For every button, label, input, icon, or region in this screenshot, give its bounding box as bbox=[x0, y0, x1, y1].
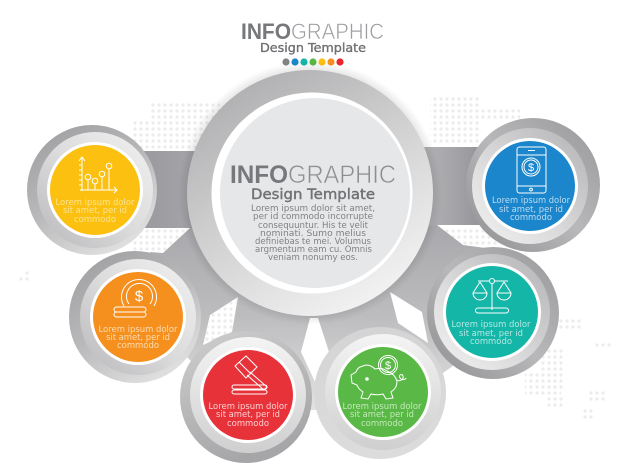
yellow text: Lorem ipsum dolor bbox=[56, 198, 135, 208]
centre body text: argmentum eam cu. Omnis bbox=[255, 245, 373, 255]
icon: gavel bbox=[232, 356, 267, 394]
panel: red circle bbox=[180, 331, 312, 463]
centre heading: Design Template bbox=[251, 187, 375, 203]
icon: line chart bbox=[79, 157, 117, 193]
centre body text bbox=[251, 204, 375, 263]
header title: Design Template bbox=[260, 40, 366, 55]
centre heading: GRAPHIC bbox=[288, 161, 396, 189]
orange text bbox=[98, 325, 178, 351]
centre body text: consequuntur. His te velit bbox=[258, 221, 369, 231]
blue text: commodo bbox=[510, 213, 552, 223]
icon: coins: $ bbox=[135, 288, 144, 305]
panel: teal circle bbox=[427, 247, 559, 379]
green text: sit amet, per id bbox=[350, 410, 414, 420]
yellow text bbox=[56, 198, 135, 225]
orange text: sit amet, per id bbox=[106, 333, 170, 343]
green text: commodo bbox=[361, 419, 403, 429]
connector band: blue to centre bbox=[400, 147, 490, 225]
connector body: lower circles bbox=[150, 225, 500, 410]
teal text: Lorem ipsum dolor bbox=[452, 320, 531, 330]
centre body text: veniam nonumy eos. bbox=[268, 253, 358, 263]
blue text: sit amet, per id bbox=[499, 205, 563, 215]
red text: Lorem ipsum dolor bbox=[208, 402, 288, 412]
connector band: yellow to centre bbox=[130, 151, 240, 228]
red text: commodo bbox=[227, 419, 269, 429]
centre body text: definiebas te mei. Volumus bbox=[255, 237, 372, 247]
green text bbox=[342, 402, 422, 429]
centre heading bbox=[230, 161, 396, 203]
dotted world map background bbox=[18, 96, 612, 420]
panel: green circle bbox=[314, 327, 446, 459]
header title: INFO bbox=[241, 19, 291, 44]
teal text: commodo bbox=[470, 337, 512, 347]
red text: sit amet, per id bbox=[216, 410, 280, 420]
icon: piggy bank: $ bbox=[385, 360, 391, 372]
panel: centre circle bbox=[178, 61, 442, 325]
red text bbox=[208, 402, 288, 429]
panel: orange circle bbox=[69, 251, 201, 383]
header colour dots bbox=[282, 58, 344, 66]
icon: smartphone: $ bbox=[528, 162, 534, 174]
teal text: sit amet, per id bbox=[459, 329, 523, 339]
yellow text: sit amet, per id bbox=[63, 206, 127, 216]
icon: balance scale bbox=[473, 278, 511, 313]
green text: Lorem ipsum dolor bbox=[342, 402, 422, 412]
yellow text: commodo bbox=[74, 215, 116, 225]
centre heading: INFO bbox=[230, 161, 288, 189]
blue text bbox=[492, 196, 570, 223]
header title bbox=[241, 19, 384, 55]
centre body text: Lorem ipsum dolor sit amet, bbox=[251, 204, 375, 214]
orange text: Lorem ipsum dolor bbox=[98, 325, 178, 335]
centre body text: nominati. Sumo melius bbox=[260, 229, 367, 239]
panel: yellow circle bbox=[27, 125, 157, 255]
header title: GRAPHIC bbox=[291, 19, 384, 44]
centre body text: per id commodo incorrupte bbox=[253, 212, 373, 222]
blue text: Lorem ipsum dolor bbox=[492, 196, 570, 206]
panel: blue circle bbox=[466, 118, 600, 252]
orange text: commodo bbox=[117, 341, 159, 351]
teal text bbox=[452, 320, 531, 347]
